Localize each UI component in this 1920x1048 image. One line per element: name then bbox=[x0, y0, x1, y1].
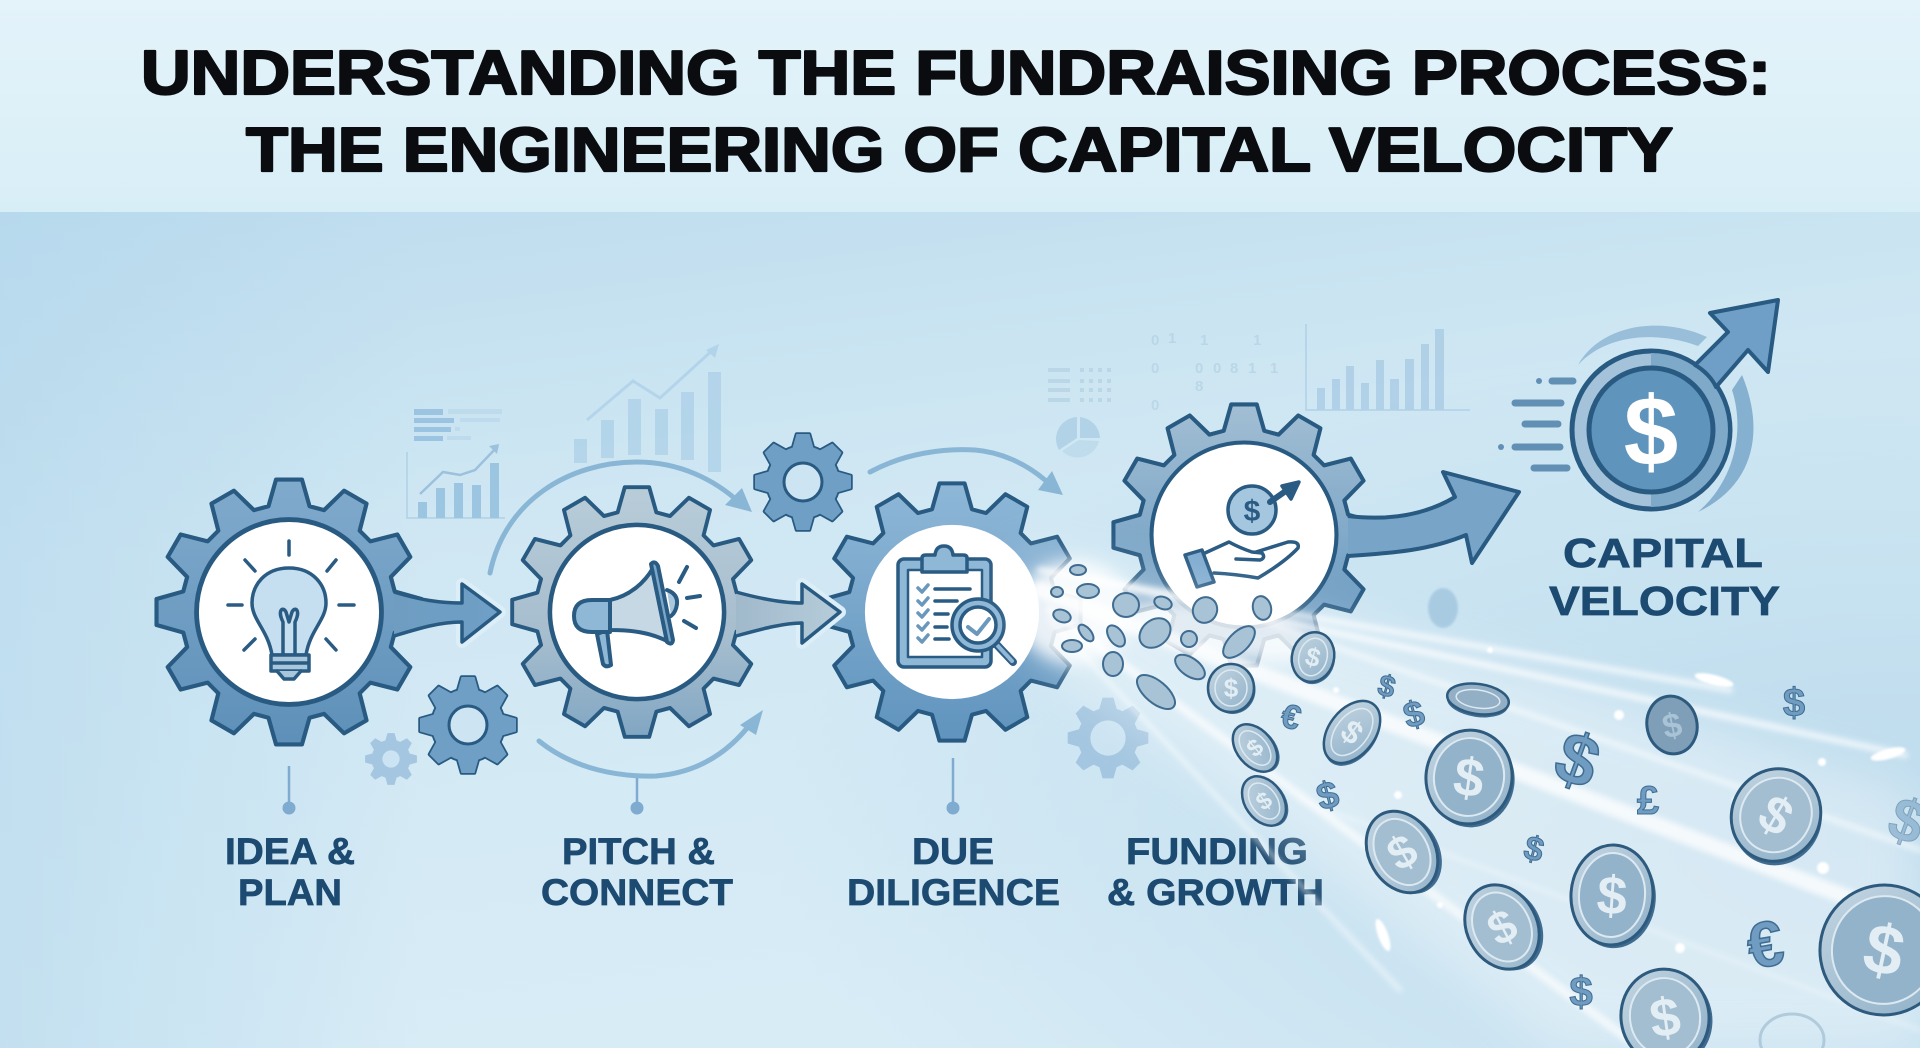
faint chart: right bar chart bbox=[1306, 324, 1470, 410]
icon: light bulb bbox=[228, 541, 354, 679]
gear 4 bbox=[1113, 404, 1375, 666]
inner coin bbox=[1589, 368, 1713, 492]
coin bbox=[1311, 690, 1393, 777]
capital velocity icon bbox=[1498, 300, 1780, 624]
coin: $ bbox=[1302, 641, 1324, 673]
coin right shade bbox=[1651, 353, 1728, 507]
coin bbox=[1233, 767, 1297, 836]
currency symbols: $ bbox=[1399, 692, 1429, 736]
stem 2 bbox=[630, 778, 644, 814]
step 1: idea and plan bbox=[157, 480, 421, 913]
currency symbols: $ bbox=[1312, 773, 1344, 819]
arrow: step 4 to capital velocity bbox=[1348, 472, 1519, 563]
coin: $ bbox=[1334, 712, 1370, 752]
currency symbols: $ bbox=[1569, 968, 1593, 1015]
faint data readout: 8 bbox=[1230, 360, 1238, 377]
label: due diligence: DUE bbox=[912, 831, 994, 872]
label: funding and growth bbox=[1107, 831, 1324, 913]
icon: hand holding coin: $ bbox=[1244, 495, 1261, 528]
coin bbox=[1567, 842, 1659, 951]
coin bbox=[1713, 752, 1840, 882]
gear 1 bbox=[157, 480, 421, 744]
coin: $ bbox=[1659, 705, 1685, 747]
faint data readout: 1 bbox=[1200, 332, 1208, 349]
small gear: lower left bbox=[420, 677, 516, 773]
currency symbols: € bbox=[1277, 697, 1305, 738]
label: idea and plan bbox=[225, 831, 355, 913]
faint chart: large bar chart with trend bbox=[574, 344, 721, 472]
flow arc: over gear 2 bbox=[490, 462, 752, 573]
light beams bbox=[1015, 555, 1920, 1048]
faint data readout bbox=[1048, 330, 1278, 414]
flow arc: under gear 2 bbox=[539, 710, 763, 776]
coin with dollar bbox=[1572, 351, 1730, 509]
label: capital velocity: CAPITAL bbox=[1563, 530, 1763, 576]
title: UNDERSTANDING THE FUNDRAISING PROCESS: bbox=[141, 39, 1771, 108]
coin bbox=[1352, 797, 1456, 908]
small gear: upper middle bbox=[755, 434, 851, 530]
coin bbox=[1419, 724, 1521, 833]
label: idea and plan: PLAN bbox=[238, 872, 342, 913]
currency symbols: $ bbox=[1545, 716, 1610, 805]
currency symbols: £ bbox=[1637, 779, 1659, 823]
coin: $ bbox=[1378, 823, 1426, 881]
faint data readout: 1 bbox=[1270, 360, 1278, 377]
large coin at right edge: $ bbox=[1857, 908, 1911, 992]
faint data readout: 0 bbox=[1151, 332, 1159, 349]
coin bbox=[1286, 627, 1341, 689]
icon: hand holding coin bbox=[1185, 482, 1299, 587]
coin: $ bbox=[1478, 898, 1526, 956]
faint data readout: 0 bbox=[1195, 360, 1203, 377]
coin: $ bbox=[1242, 733, 1270, 763]
coin: $ bbox=[1595, 865, 1629, 927]
coin: $ bbox=[1224, 673, 1239, 703]
coin: $ bbox=[1748, 784, 1803, 848]
flat coin bbox=[1445, 680, 1511, 721]
faint data readout: 0 bbox=[1151, 360, 1159, 377]
step 3: due diligence bbox=[823, 483, 1081, 913]
label: pitch and connect: PITCH & bbox=[562, 831, 715, 872]
faint data readout: 8 bbox=[1195, 378, 1203, 395]
flow arc: over gear 3 bbox=[870, 450, 1063, 495]
header band bbox=[0, 0, 1920, 212]
coin bbox=[1208, 664, 1256, 714]
small gear: pale lower right bbox=[1068, 698, 1148, 778]
coin bbox=[1615, 963, 1719, 1048]
faint data readout: 0 bbox=[1151, 397, 1159, 414]
currency symbols: $ bbox=[1374, 669, 1399, 705]
label: due diligence bbox=[847, 831, 1060, 913]
gear 2 bbox=[512, 487, 762, 737]
large coin at right edge bbox=[1808, 873, 1920, 1027]
speed lines bbox=[1498, 378, 1573, 468]
coin: $ bbox=[1646, 986, 1684, 1048]
currency symbols bbox=[1277, 669, 1920, 1015]
label: funding and growth: & GROWTH bbox=[1107, 872, 1324, 913]
crescent swooshes bbox=[1578, 326, 1753, 512]
coin: $ bbox=[1450, 746, 1488, 810]
faint leaf shape bbox=[1428, 588, 1458, 628]
label: funding and growth: FUNDING bbox=[1126, 831, 1308, 872]
label: pitch and connect bbox=[541, 831, 733, 913]
coin bbox=[1450, 870, 1558, 985]
currency symbols: € bbox=[1741, 906, 1789, 983]
label: pitch and connect: CONNECT bbox=[541, 872, 733, 913]
coin bbox=[1224, 715, 1289, 782]
small gear: lower left pale bbox=[365, 733, 417, 785]
stem 3 bbox=[946, 758, 960, 814]
background bbox=[0, 212, 1920, 1048]
icon: megaphone bbox=[574, 562, 700, 666]
faded coin at bottom bbox=[1760, 1014, 1824, 1048]
title: THE ENGINEERING OF CAPITAL VELOCITY bbox=[246, 116, 1673, 185]
faint data readout: 0 bbox=[1213, 360, 1221, 377]
faint data readout: 1 bbox=[1168, 330, 1176, 347]
faint data readout: 1 bbox=[1248, 360, 1256, 377]
currency symbols: $ bbox=[1783, 681, 1805, 725]
stem 1 bbox=[282, 766, 296, 814]
label: idea and plan: IDEA & bbox=[225, 831, 355, 872]
coin bbox=[1642, 691, 1702, 759]
faint pie chart bbox=[1056, 417, 1100, 458]
gear 3 bbox=[823, 483, 1081, 741]
faint data readout: 1 bbox=[1253, 332, 1261, 349]
background left shade bbox=[0, 212, 420, 1048]
label: due diligence: DILIGENCE bbox=[847, 872, 1060, 913]
label: capital velocity: VELOCITY bbox=[1549, 578, 1780, 624]
step 4: funding and growth bbox=[1107, 404, 1519, 913]
step 2: pitch and connect bbox=[512, 487, 762, 913]
dollar glyph: $ bbox=[1624, 376, 1678, 486]
rising arrow bbox=[1695, 300, 1778, 387]
coin: $ bbox=[1251, 786, 1278, 816]
small coins stream bbox=[1051, 565, 1274, 715]
arrow: step 2 to 3 bbox=[736, 584, 840, 643]
label: capital velocity bbox=[1549, 530, 1780, 624]
icon: clipboard and magnifier bbox=[898, 546, 1013, 667]
arrow: step 1 to 2 bbox=[394, 584, 500, 642]
faint chart: small bar chart with list bbox=[407, 409, 505, 518]
title bbox=[141, 39, 1771, 185]
currency symbols: $ bbox=[1520, 829, 1548, 870]
background right glow bbox=[0, 212, 1920, 1048]
